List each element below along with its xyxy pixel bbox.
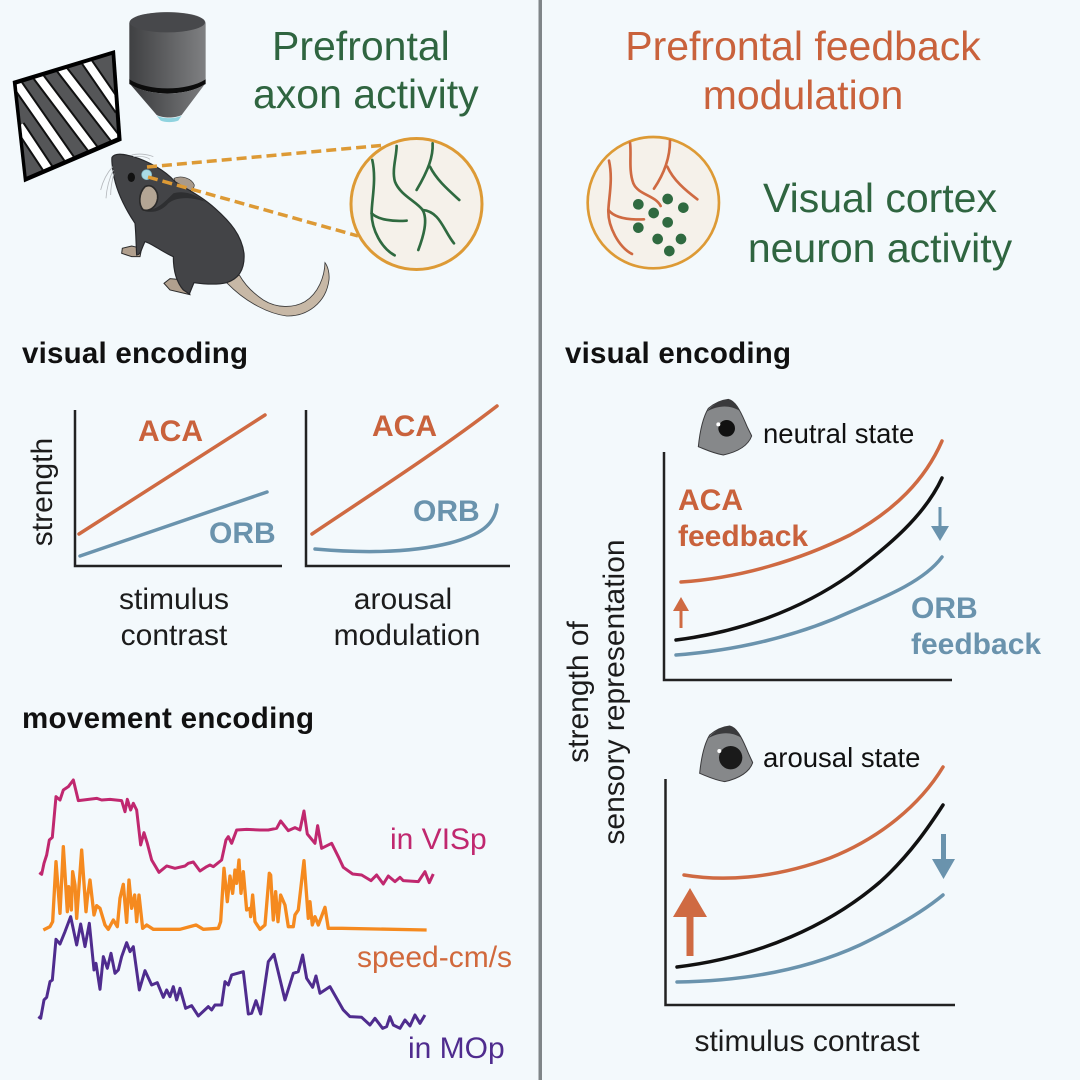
arrow: ORB down small	[931, 507, 949, 541]
panel: prefrontal axon activity	[13, 12, 482, 316]
title: visual cortex neuron activity: neuron activity	[748, 225, 1013, 271]
trace: in VISp: in VISp	[390, 823, 487, 856]
label: neutral state: neutral state	[763, 418, 914, 449]
title: prefrontal feedback modulation	[625, 23, 981, 118]
heading: movement encoding: movement encoding	[22, 702, 314, 735]
chart: arousal modulation: ACA	[372, 410, 437, 443]
chart: stimulus contrast: contrast	[121, 619, 228, 652]
icon: mouse	[101, 154, 329, 316]
circle: feedback and neuron inset	[588, 137, 719, 268]
tail	[227, 263, 329, 316]
whiskers	[101, 154, 153, 198]
chart: arousal state curves	[666, 767, 955, 1005]
chart: stimulus contrast: ACA	[138, 415, 203, 448]
chart: arousal modulation: ORB	[413, 495, 480, 528]
chart: arousal modulation: modulation	[334, 619, 480, 652]
chart: stimulus contrast: stimulus	[119, 583, 229, 616]
icon: eye neutral state	[698, 399, 752, 455]
eye	[128, 173, 135, 182]
title: prefrontal axon activity: Prefrontal	[272, 23, 450, 69]
trace: in VISp	[39, 780, 487, 884]
icon: eye arousal state	[700, 726, 753, 782]
x-axis label: stimulus contrast: stimulus contrast	[694, 1025, 920, 1058]
trace: speed	[43, 847, 512, 974]
heading: visual encoding right: visual encoding	[565, 337, 791, 370]
front ear	[140, 186, 158, 210]
title: prefrontal axon activity	[253, 23, 479, 117]
chart: arousal modulation	[306, 406, 510, 652]
arrow: ACA up large	[673, 888, 707, 956]
hind paw	[164, 279, 190, 295]
chart: arousal modulation: arousal	[354, 583, 452, 616]
chart: stimulus contrast: strength	[26, 438, 59, 546]
chart: neutral state curves	[664, 441, 1041, 680]
y-axis label: strength of sensory representation: strength of	[562, 620, 595, 763]
title: prefrontal axon activity: axon activity	[253, 71, 479, 117]
circle: axon inset	[351, 138, 482, 270]
arrow: ORB down large	[932, 834, 955, 879]
heading: visual encoding left: visual encoding	[22, 337, 248, 370]
panel divider	[538, 0, 542, 1080]
chart: stimulus contrast	[26, 410, 282, 652]
body	[112, 154, 244, 294]
trace: speed: speed-cm/s	[357, 941, 512, 974]
trace: in MOp	[38, 917, 505, 1065]
icon: drifting grating stimulus	[13, 50, 122, 182]
cranial window	[142, 170, 152, 180]
neck shadow	[140, 192, 205, 212]
title: visual cortex neuron activity	[748, 175, 1013, 271]
y-axis label: strength of sensory representation: sensory representation	[598, 539, 631, 845]
chart: movement traces	[38, 780, 512, 1065]
dashed projection lines	[147, 145, 386, 236]
title: prefrontal feedback modulation: modulation	[703, 72, 903, 118]
label: arousal state: arousal state	[763, 742, 920, 773]
chart: stimulus contrast: ORB	[209, 517, 276, 550]
trace: in MOp: in MOp	[408, 1032, 505, 1065]
title: visual cortex neuron activity: Visual cortex	[763, 175, 997, 221]
rear ear	[174, 177, 194, 191]
chart: neutral state curves: ORB	[911, 592, 978, 625]
chart: neutral state curves: feedback	[911, 628, 1041, 661]
y-axis label: strength of sensory representation	[562, 539, 631, 845]
title: prefrontal feedback modulation: Prefrontal feedback	[625, 23, 981, 69]
icon: microscope objective	[129, 12, 206, 122]
arrow: ACA up small	[673, 597, 689, 628]
chart: neutral state curves: feedback	[678, 520, 808, 553]
front paw	[122, 246, 142, 257]
chart: neutral state curves: ACA	[678, 484, 743, 517]
